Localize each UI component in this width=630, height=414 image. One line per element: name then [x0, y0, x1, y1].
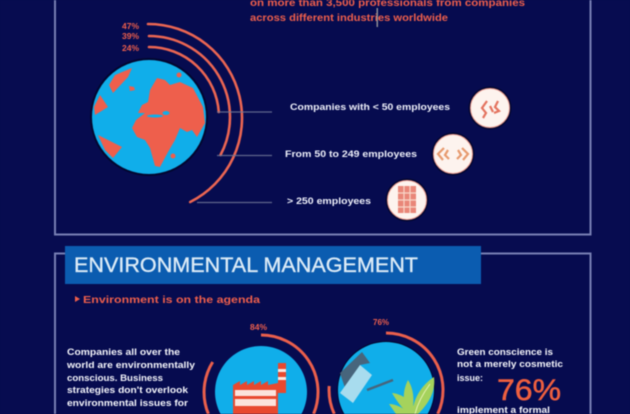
left text block: conscious. Business: [67, 373, 163, 383]
panel: environmental management: [55, 246, 590, 414]
arcs chart: company size shares: [148, 24, 242, 202]
arc percentages: 47%: [122, 21, 139, 31]
left text block: Companies all over the: [67, 347, 180, 357]
left text block: strategies don't overlook: [67, 385, 189, 395]
76% label: 76%: [373, 318, 389, 327]
panel: survey sample: [55, 0, 590, 234]
icon: plant: [389, 377, 434, 414]
heading bar: ENVIRONMENTAL MANAGEMENT: [74, 254, 418, 277]
left text block: environmental issues for: [67, 398, 188, 408]
right text block: not a merely cosmetic: [457, 359, 563, 369]
size labels: From 50 to 249 employees: [285, 149, 417, 160]
intro text: across different industries worldwide: [250, 13, 449, 24]
left text block: [66, 347, 196, 408]
icon: medium company: [432, 132, 474, 176]
size labels: > 250 employees: [287, 196, 371, 207]
big stat: 76%: 76%: [497, 374, 561, 407]
right text block: [457, 347, 563, 414]
icon: small company: [468, 86, 512, 130]
icon: watering can: [340, 352, 393, 403]
donut: 76% with watering can: [329, 333, 443, 414]
right text block: issue:: [457, 373, 483, 383]
icon: large company building: [386, 178, 428, 222]
intro text: [250, 0, 526, 24]
right text block: Green conscience is: [457, 347, 553, 357]
leader lines: [197, 112, 272, 202]
globe with land masses: [90, 58, 208, 176]
arc percentages: 24%: [122, 43, 139, 53]
text cursor mark: [376, 8, 378, 27]
size labels: [285, 102, 450, 207]
size labels: Companies with < 50 employees: [290, 102, 450, 113]
subheading: Environment is on the agenda: [83, 294, 260, 306]
icon: factory: [233, 363, 286, 414]
arc percentages: 39%: [122, 31, 139, 41]
heading bar: [65, 246, 481, 284]
84% label: 84%: [250, 322, 267, 332]
arc percentages: [122, 21, 139, 53]
donut: 84% with factory: [204, 335, 318, 414]
left text block: world are environmentally: [66, 360, 196, 370]
